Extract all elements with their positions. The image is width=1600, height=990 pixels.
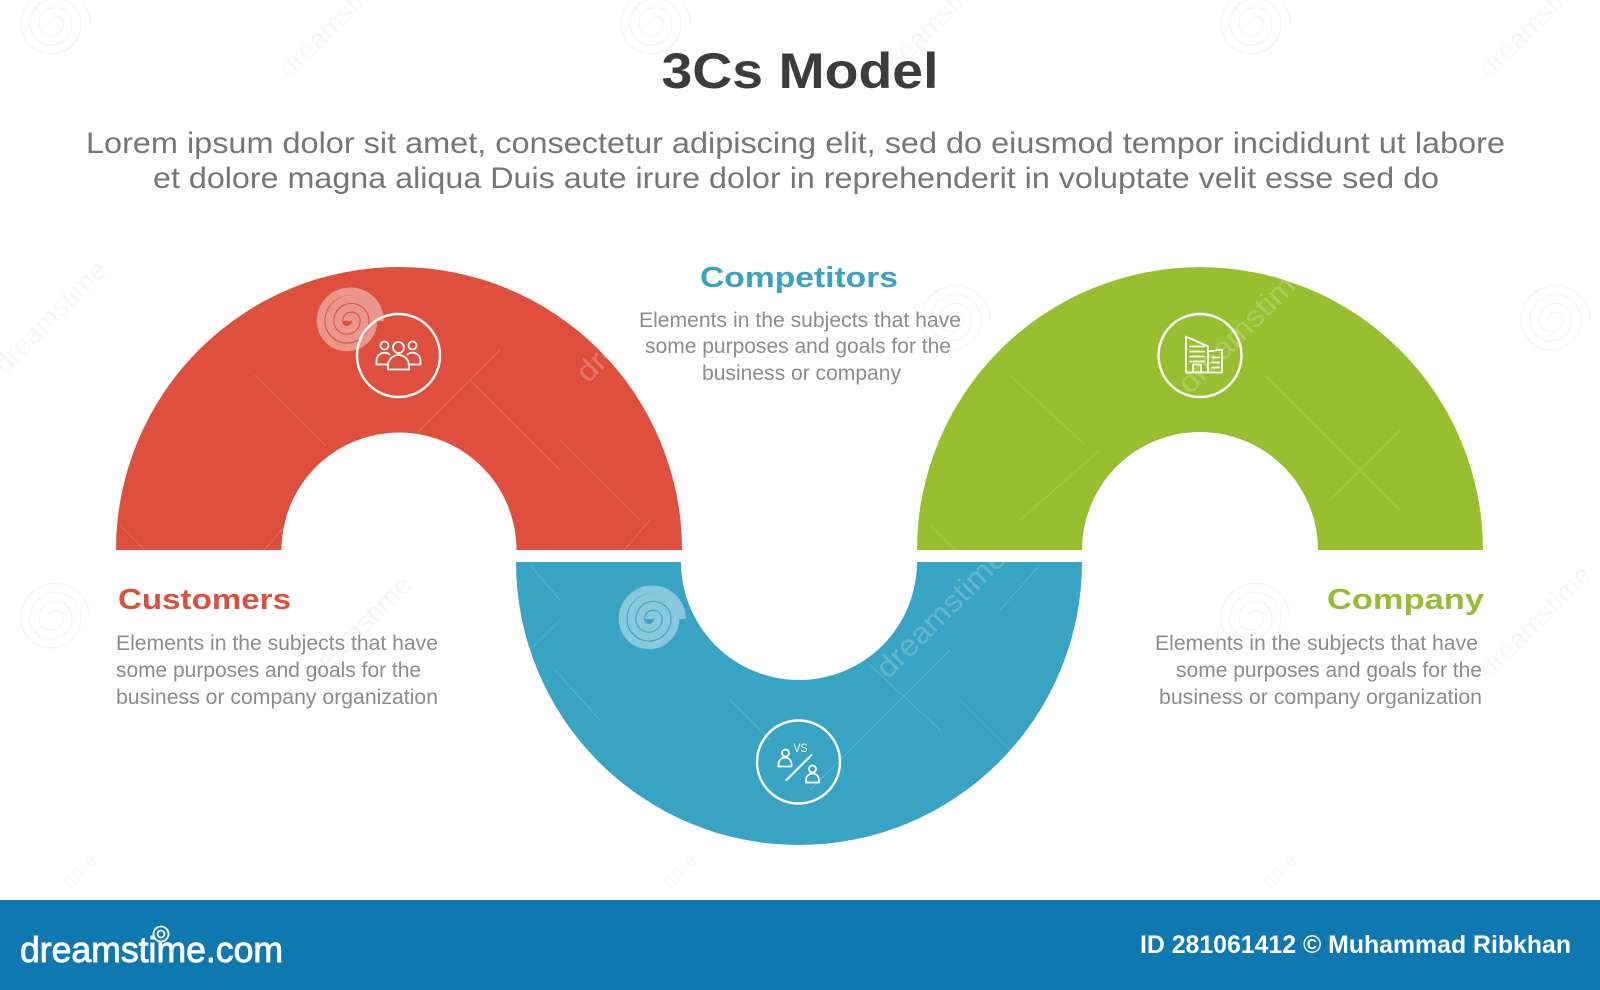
text block: customers: Elements in the subjects that have: [116, 632, 438, 655]
text block: competitors: some purposes and goals for the: [645, 335, 951, 358]
text block: competitors: Elements in the subjects that have: [639, 309, 961, 332]
text block: competitors: business or company: [702, 362, 901, 385]
infographic canvas: dreamstime: [870, 541, 1013, 685]
text block: company: some purposes and goals for the: [1176, 659, 1482, 682]
footer credit: ID 281061412 © Muhammad Ribkhan: [1140, 931, 1571, 959]
watermark spiral on competitors arch: [623, 589, 682, 645]
icon: company building: [1158, 314, 1242, 397]
icon: footer logo spiral: [154, 926, 168, 942]
icon: customers group of people: [357, 314, 440, 397]
infographic canvas: time: [56, 846, 103, 894]
title: 3Cs Model: [662, 43, 938, 99]
infographic canvas: dreamstime: [570, 245, 713, 389]
infographic canvas: dreamstime: [1172, 256, 1315, 400]
text block: competitors: [639, 262, 961, 385]
infographic canvas: time: [656, 846, 703, 894]
infographic canvas: time: [1256, 846, 1303, 894]
icon: competitors versus: VS: [794, 741, 808, 755]
text block: customers: business or company organization: [116, 686, 438, 709]
subtitle text: et dolore magna aliqua Duis aute irure dolor in reprehenderit in voluptate velit esse sed do: [153, 162, 1439, 195]
text block: customers: some purposes and goals for the: [116, 659, 421, 682]
subtitle text: Lorem ipsum dolor sit amet, consectetur adipiscing elit, sed do eiusmod tempor incididunt ut labore: [86, 127, 1505, 160]
text block: competitors: Competitors: [700, 262, 898, 294]
footer logo text: dreamstime.com: [20, 929, 283, 970]
text block: customers: Customers: [118, 584, 291, 616]
text block: customers: [116, 584, 438, 709]
text block: company: Company: [1327, 584, 1484, 616]
watermark spiral on customers arch: [321, 291, 380, 347]
text block: company: business or company organization: [1159, 686, 1482, 709]
infographic canvas: dreamstime: [1472, 559, 1598, 684]
subtitle text: [86, 127, 1505, 195]
infographic canvas: dreamstime: [292, 569, 418, 694]
text block: company: [1155, 584, 1484, 709]
footer band: [0, 900, 1600, 990]
panel: customers arch: [116, 267, 682, 550]
panel: competitors arch: [516, 562, 1082, 845]
text block: company: Elements in the subjects that have: [1155, 632, 1478, 655]
icon: competitors versus: [757, 720, 840, 804]
panel: company arch: [917, 267, 1483, 550]
